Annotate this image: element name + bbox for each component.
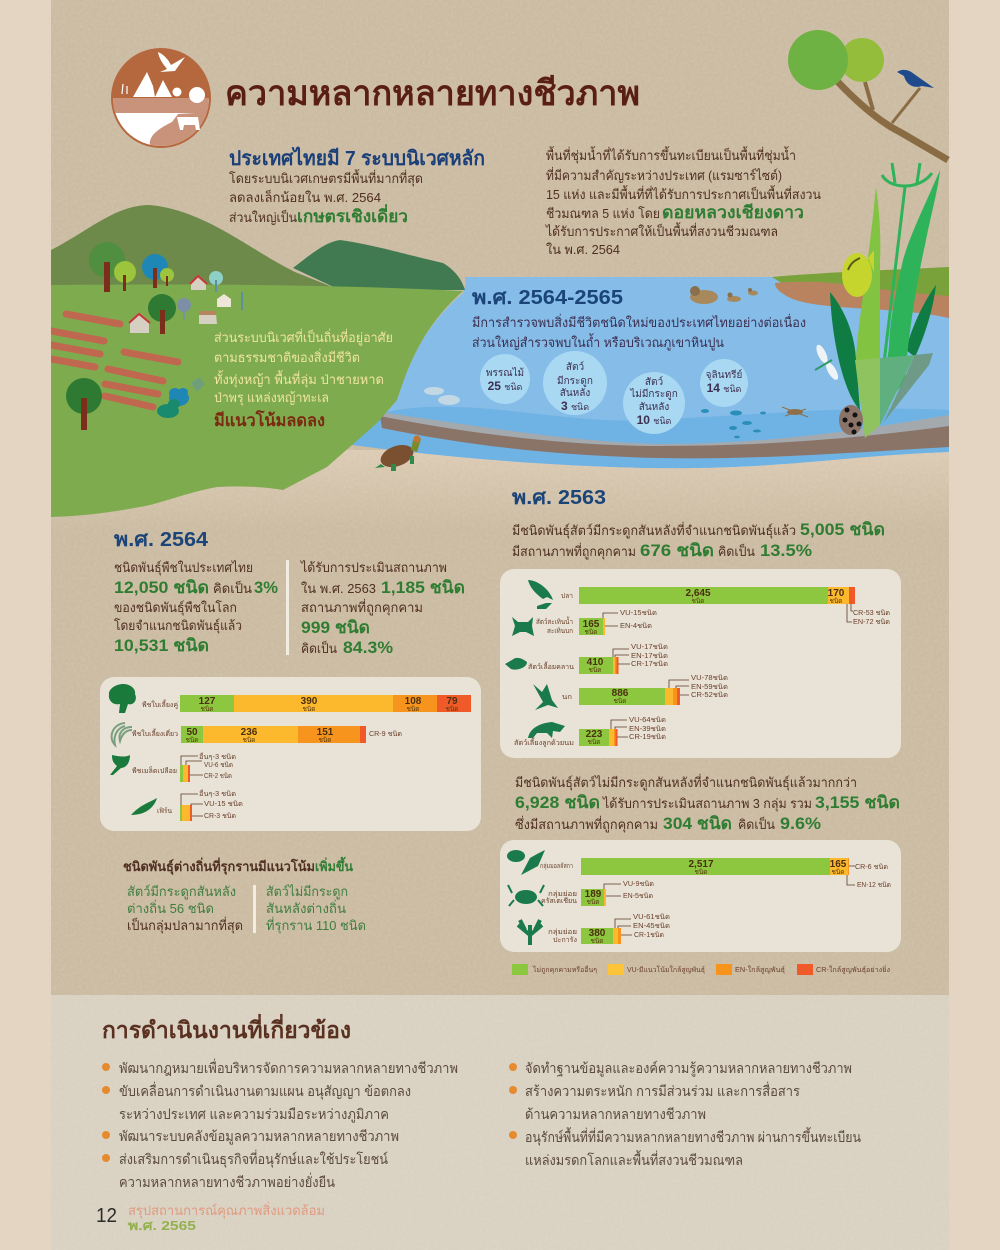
legend [512, 964, 890, 975]
text block: assessment 2563: 999 ชนิด [301, 618, 370, 637]
bar: fish: 170 [828, 588, 845, 599]
text block: invertebrates: ซึ่งมีสถานภาพที่ถูกคุกคาม [515, 816, 658, 833]
bar: mammals: VU-64ชนิด [629, 716, 666, 724]
panel: vertebrate threat chart [500, 569, 901, 758]
text block: assessment 2563: สถานภาพที่ถูกคุกคาม [301, 599, 423, 616]
icon: fish [528, 580, 553, 609]
text block: invertebrates: 3,155 ชนิด [815, 793, 900, 812]
text block: land ecosystems [214, 328, 393, 430]
bar: ferns: CR-3 ชนิด [204, 812, 236, 820]
text block: invasive species: ที่รุกราน 110 ชนิด [266, 917, 366, 934]
text block: invasive species: เพิ่มขึ้น [315, 856, 353, 874]
bar: dicots: 127 [199, 696, 216, 707]
text block: vertebrates 2563: คิดเป็น [718, 542, 755, 559]
illustration: landscape [51, 205, 949, 517]
illustration: fish, ducks and insects [424, 286, 840, 438]
illustration: branch, trees and bird [788, 30, 948, 160]
text block: invasive species: เป็นกลุ่มปลามากที่สุด [127, 916, 243, 934]
title: ความหลากหลายทางชีวภาพ [225, 74, 640, 113]
bar: corals: EN-45ชนิด [633, 922, 670, 930]
text block: plants 2564 [114, 529, 278, 655]
text block: wetlands: ชีวมณฑล 5 แห่ง โดย [546, 206, 660, 221]
heading: related actions: การดำเนินงานที่เกี่ยวข้อง [102, 1013, 351, 1043]
bar: amphibians: VU-15ชนิด [620, 609, 657, 617]
text block: invertebrates: ได้รับการประเมินสถานภาพ 3 กลุ่ม รวม [602, 796, 812, 812]
panel: plant threat chart [100, 677, 481, 831]
illustration: turtle [375, 436, 421, 471]
bar: monocots: 50 [186, 727, 198, 738]
bar: monocots: ชนิด [242, 736, 256, 744]
text block: vertebrates 2563: มีชนิดพันธุ์สัตว์มีกระดูกสันหลังที่จำแนกชนิดพันธุ์แล้ว [512, 522, 796, 539]
bar: fish: ปลา [561, 593, 573, 600]
icon: dicot tree [109, 684, 136, 713]
bubble: microbes [700, 359, 748, 407]
bar: corals: 380 [589, 928, 606, 939]
bubble: vertebrates: 3 ชนิด [561, 399, 589, 413]
bar: reptiles: VU-17ชนิด [631, 643, 668, 651]
bar: monocots [132, 726, 402, 744]
text block: invertebrates: คิดเป็น [738, 815, 775, 832]
bar: fish: EN-72 ชนิด [853, 618, 890, 626]
water [352, 277, 949, 468]
bar: mammals: EN-39ชนิด [629, 725, 666, 733]
text block: invertebrates: 304 ชนิด [663, 814, 732, 833]
bar: birds [562, 674, 728, 705]
text block: invasive species: สัตว์ไม่มีกระดูก [266, 884, 348, 900]
bar: corals: ชนิด [590, 937, 604, 945]
bubble: invertebrates: สันหลัง [639, 402, 669, 413]
list: actions right: ด้านความหลากหลายทางชีวภาพ [525, 1106, 706, 1122]
bubble: invertebrates: 10 ชนิด [637, 413, 672, 427]
bubble: invertebrates: ไม่มีกระดูก [629, 388, 678, 400]
bar: monocots: CR-9 ชนิด [369, 730, 402, 738]
bar: reptiles: 410 [587, 657, 604, 668]
bar: molluscs: ชนิด [831, 868, 845, 876]
list: actions right: จัดทำฐานข้อมูลและองค์ความรู้ความหลากหลายทางชีวภาพ [525, 1060, 852, 1077]
text block: assessment 2563: 1,185 ชนิด [381, 578, 465, 597]
bar: dicots: พืชใบเลี้ยงคู่ [142, 698, 178, 709]
bar: monocots: ชนิด [318, 736, 332, 744]
text block: vertebrates 2563: มีสถานภาพที่ถูกคุกคาม [512, 543, 636, 560]
bar: corals: VU-61ชนิด [633, 913, 670, 921]
bar: gymnosperms: อื่นๆ-3 ชนิด [199, 752, 236, 761]
bar: dicots: ชนิด [406, 705, 420, 713]
text block: wetlands: พื้นที่ชุ่มน้ำที่ได้รับการขึ้นทะเบียนเป็นพื้นที่ชุ่มน้ำ [546, 146, 796, 164]
text block: vertebrates 2563: พ.ศ. 2563 [512, 487, 606, 509]
bar: corals: ปะการัง [553, 936, 577, 944]
bubble: vertebrates [543, 351, 607, 415]
footer: page number and report title: 12 [96, 1205, 117, 1227]
text block: vertebrates 2563: 13.5% [760, 541, 812, 560]
text block: new species 2564-2565 [472, 287, 806, 351]
bar: dicots: ชนิด [445, 705, 459, 713]
text block: assessment 2563: ได้รับการประเมินสถานภาพ [300, 560, 447, 575]
list: actions left [102, 1059, 458, 1190]
text block: invertebrates: 6,928 ชนิด [515, 793, 600, 812]
icon: monocot grass [112, 723, 132, 745]
olive hill [51, 205, 340, 290]
text block: wetlands: ใน พ.ศ. 2564 [546, 242, 620, 257]
footer: page number and report title: พ.ศ. 2565 [128, 1218, 196, 1233]
text block: land ecosystems: ส่วนระบบนิเวศที่เป็นถิ่นที่อยู่อาศัย [214, 328, 393, 346]
bubble: vertebrates: มีกระดูก [557, 375, 593, 387]
list: actions left: ส่งเสริมการดำเนินธุรกิจที่อนุรักษ์และใช้ประโยชน์ [119, 1150, 388, 1168]
icon: mammal [528, 722, 565, 738]
text block: new species 2564-2565: มีการสำรวจพบสิ่งมีชีวิตชนิดใหม่ของประเทศไทยอย่างต่อเนื่อง [472, 314, 806, 330]
text block: new species 2564-2565: พ.ศ. 2564-2565 [472, 287, 623, 309]
bar: mammals: CR-19ชนิด [629, 733, 666, 741]
text block: wetlands [545, 146, 821, 257]
bar: ferns [157, 789, 243, 821]
bar: amphibians [536, 609, 657, 636]
text block: plants 2564: โดยจำแนกชนิดพันธุ์แล้ว [114, 618, 242, 634]
text block: wetlands: ดอยหลวงเชียงดาว [662, 202, 804, 222]
bar: molluscs: EN-12 ชนิด [857, 881, 891, 889]
bar: molluscs: ชนิด [694, 868, 708, 876]
bar: dicots: ชนิด [302, 705, 316, 713]
bar: amphibians: ชนิด [584, 628, 598, 636]
bubble: plants: พรรณไม้ [486, 367, 524, 379]
bar: corals: CR-1ชนิด [634, 931, 664, 939]
illustration: trees, houses and farm plots [46, 242, 243, 430]
text block: invasive species [123, 856, 366, 934]
bar: fish [561, 587, 890, 626]
bar: amphibians: 165 [583, 619, 600, 630]
text block: ecosystems: ลดลงเล็กน้อยใน พ.ศ. 2564 [229, 188, 381, 205]
list: actions right: แหล่งมรดกโลกและพื้นที่สงวนชีวมณฑล [525, 1150, 743, 1168]
bar: amphibians: สัตว์สะเทินน้ำ [536, 615, 573, 626]
bar: birds: VU-78ชนิด [691, 674, 728, 682]
bar: crustaceans: ชนิด [586, 898, 600, 906]
bar: crustaceans: VU-9ชนิด [623, 880, 654, 888]
icon: mollusc [507, 850, 545, 875]
bar: gymnosperms: พืชเมล็ดเปลือย [132, 766, 177, 775]
bottom section panel [51, 995, 949, 1250]
far bank [772, 267, 949, 318]
bar: dicots [142, 695, 471, 713]
bar: dicots: 108 [405, 696, 422, 707]
bar: mammals: 223 [586, 729, 603, 740]
bar: gymnosperms: VU-6 ชนิด [204, 761, 233, 769]
text block: plants 2564: ชนิดพันธุ์พืชในประเทศไทย [114, 560, 253, 576]
text block: land ecosystems: มีแนวโน้มลดลง [214, 410, 325, 430]
bar: reptiles: EN-17ชนิด [631, 652, 668, 660]
bar: monocots: พืชใบเลี้ยงเดี่ยว [132, 727, 178, 738]
paper panel [51, 0, 949, 1000]
bar: corals: กลุ่มย่อย [548, 929, 577, 936]
bar: mammals [514, 716, 666, 747]
text block: vertebrates 2563: 676 ชนิด [640, 541, 714, 560]
bubble: plants [480, 354, 530, 404]
legend: VU-มีแนวโน้มใกล้สูญพันธุ์ [627, 965, 705, 974]
bar: birds: 886 [612, 688, 629, 699]
icon: gymnosperm leaf [110, 755, 130, 775]
text block: plants 2564: ของชนิดพันธุ์พืชในโลก [114, 600, 237, 616]
dark hill [293, 240, 465, 290]
text block: plants 2564: พ.ศ. 2564 [114, 529, 209, 551]
bar: birds: ชนิด [613, 697, 627, 705]
text block: plants 2564: คิดเป็น [213, 579, 252, 596]
list: actions left: พัฒนากฎหมายเพื่อบริหารจัดการความหลากหลายทางชีวภาพ [119, 1059, 458, 1076]
text block: land ecosystems: ทั้งทุ่งหญ้า พื้นที่ลุ่ม ป่าชายหาด [214, 370, 384, 388]
bubble: vertebrates: สันหลัง [560, 388, 590, 399]
bar: fish: CR-53 ชนิด [853, 609, 890, 617]
bubble: microbes: จุลินทรีย์ [706, 369, 742, 381]
text block: plants 2564: 12,050 ชนิด [114, 578, 209, 597]
legend: ไม่ถูกคุกคามหรืออื่นๆ [532, 965, 597, 974]
bar: ferns: อื่นๆ-3 ชนิด [199, 789, 236, 798]
text block: land ecosystems: ป่าพรุ แหล่งหญ้าทะเล [214, 390, 329, 406]
footer: page number and report title [96, 1202, 325, 1233]
text block: assessment 2563: 84.3% [343, 638, 393, 657]
list: actions left: ระหว่างประเทศ และความร่วมมือระหว่างภูมิภาค [119, 1106, 389, 1123]
list: actions right: อนุรักษ์พื้นที่ที่มีความหลากหลายทางชีวภาพ ผ่านการขึ้นทะเบียน [525, 1127, 861, 1146]
bar: gymnosperms [132, 752, 236, 782]
text block: invertebrates: มีชนิดพันธุ์สัตว์ไม่มีกระดูกสันหลังที่จำแนกชนิดพันธุ์แล้วมากกว่า [515, 774, 857, 791]
text block: ecosystems: ส่วนใหญ่เป็น [229, 208, 297, 225]
bar: monocots: 151 [317, 727, 334, 738]
bar: reptiles: สัตว์เลื้อยคลาน [528, 660, 574, 671]
legend: EN-ใกล้สูญพันธุ์ [735, 965, 785, 974]
list: actions left: พัฒนาระบบคลังข้อมูลความหลากหลายทางชีวภาพ [119, 1128, 399, 1145]
text block: invasive species: ชนิดพันธุ์ต่างถิ่นที่รุกรานมีแนวโน้ม [123, 857, 315, 875]
bar: molluscs: CR-6 ชนิด [855, 863, 888, 871]
bar: dicots: 79 [446, 696, 458, 707]
bubble: plants: 25 ชนิด [488, 379, 523, 393]
icon: frog [512, 617, 534, 636]
list: actions right: สร้างความตระหนัก การมีส่วนร่วม และการสื่อสาร [525, 1082, 800, 1099]
text block: plants 2564: 3% [254, 578, 278, 597]
text block: wetlands: ได้รับการประกาศให้เป็นพื้นที่สงวนชีวมณฑล [545, 222, 778, 239]
illustration: water plants and frog [830, 163, 940, 438]
footer: page number and report title: สรุปสถานการณ์คุณภาพสิ่งแวดล้อม [128, 1202, 325, 1219]
bar: ferns: เฟิร์น [157, 807, 172, 815]
bar: corals [548, 913, 670, 945]
text block: invasive species: สัตว์มีกระดูกสันหลัง [127, 884, 236, 900]
text block: ecosystems: โดยระบบนิเวศเกษตรมีพื้นที่มากที่สุด [229, 169, 423, 187]
text block: assessment 2563: ใน พ.ศ. 2563 [301, 581, 376, 596]
panel: invertebrate threat chart [500, 840, 901, 952]
bar: birds: นก [562, 694, 572, 701]
bar: molluscs: 165 [830, 859, 847, 870]
green land [51, 285, 463, 517]
bar: amphibians: EN-4ชนิด [620, 622, 652, 630]
legend: CR-ใกล้สูญพันธุ์อย่างยิ่ง [816, 965, 890, 974]
list: actions left: ความหลากหลายทางชีวภาพอย่างยั่งยืน [119, 1173, 335, 1190]
text block: vertebrates 2563 [512, 487, 885, 560]
list: actions left: ขับเคลื่อนการดำเนินงานตามแผน อนุสัญญา ข้อตกลง [119, 1082, 411, 1100]
bar: monocots: 236 [241, 727, 258, 738]
bar: amphibians: สะเทินบก [547, 627, 573, 635]
bubble: invertebrates [623, 372, 685, 434]
bar: ferns: VU-15 ชนิด [204, 800, 243, 808]
bar: crustaceans [541, 880, 654, 906]
icon: bird [533, 684, 558, 710]
bar: reptiles: CR-17ชนิด [631, 660, 668, 668]
bar: crustaceans: EN-5ชนิด [623, 892, 653, 900]
icon: fern [131, 798, 157, 815]
text block: invasive species: สันหลังต่างถิ่น [266, 900, 346, 916]
bar: birds: CR-52ชนิด [691, 691, 728, 699]
bar: reptiles [528, 643, 668, 674]
bar: fish: ชนิด [829, 597, 843, 605]
bubble: vertebrates: สัตว์ [566, 361, 584, 373]
icon: crab [508, 885, 544, 906]
text block: ecosystems: ประเทศไทยมี 7 ระบบนิเวศหลัก [229, 146, 485, 170]
text block: new species 2564-2565: ส่วนใหญ่สำรวจพบในถ้ำ หรือบริเวณภูเขาหินปูน [472, 333, 724, 351]
bar: molluscs [540, 858, 891, 889]
bar: dicots: ชนิด [200, 705, 214, 713]
text block: invasive species: ต่างถิ่น 56 ชนิด [127, 900, 214, 916]
bar: gymnosperms: CR-2 ชนิด [204, 772, 232, 780]
text block: land ecosystems: ตามธรรมชาติของสิ่งมีชีวิต [214, 349, 360, 365]
bar: reptiles: ชนิด [588, 666, 602, 674]
bar: fish: 2,645 [685, 588, 711, 599]
icon: reptile [505, 658, 527, 670]
text block: vertebrates 2563: 5,005 ชนิด [800, 520, 885, 539]
text block: assessment 2563 [300, 560, 465, 657]
bar: fish: ชนิด [691, 597, 705, 605]
bubble: invertebrates: สัตว์ [645, 376, 663, 388]
bar: mammals: ชนิด [587, 738, 601, 746]
bar: crustaceans: ครัสเตเชียน [541, 897, 577, 905]
logo: biodiversity badge [110, 48, 212, 150]
text block: wetlands: ที่มีความสำคัญระหว่างประเทศ (แรมซาร์ไซต์) [546, 167, 782, 183]
bar: dicots: 390 [301, 696, 318, 707]
text block: invertebrates: 9.6% [780, 814, 821, 833]
bubble: microbes: 14 ชนิด [707, 381, 742, 395]
text block: invertebrates [515, 774, 900, 833]
text block: assessment 2563: คิดเป็น [301, 639, 337, 656]
text block: plants 2564: 10,531 ชนิด [114, 636, 209, 655]
bar: crustaceans: กลุ่มย่อย [548, 891, 577, 898]
text block: ecosystems [229, 146, 485, 226]
bar: mammals: สัตว์เลี้ยงลูกด้วยนม [514, 736, 574, 747]
bar: birds: EN-59ชนิด [691, 683, 728, 691]
list: actions right [509, 1060, 861, 1168]
bar: molluscs: กลุ่มมอลลัสกา [540, 862, 573, 870]
icon: coral [518, 920, 542, 945]
text block: ecosystems: เกษตรเชิงเดี่ยว [297, 204, 408, 226]
text block: wetlands: 15 แห่ง และมีพื้นที่ที่ได้รับการประกาศเป็นพื้นที่สงวน [546, 185, 821, 202]
bar: monocots: ชนิด [185, 736, 199, 744]
bar: molluscs: 2,517 [688, 859, 714, 870]
bar: crustaceans: 189 [585, 889, 602, 900]
